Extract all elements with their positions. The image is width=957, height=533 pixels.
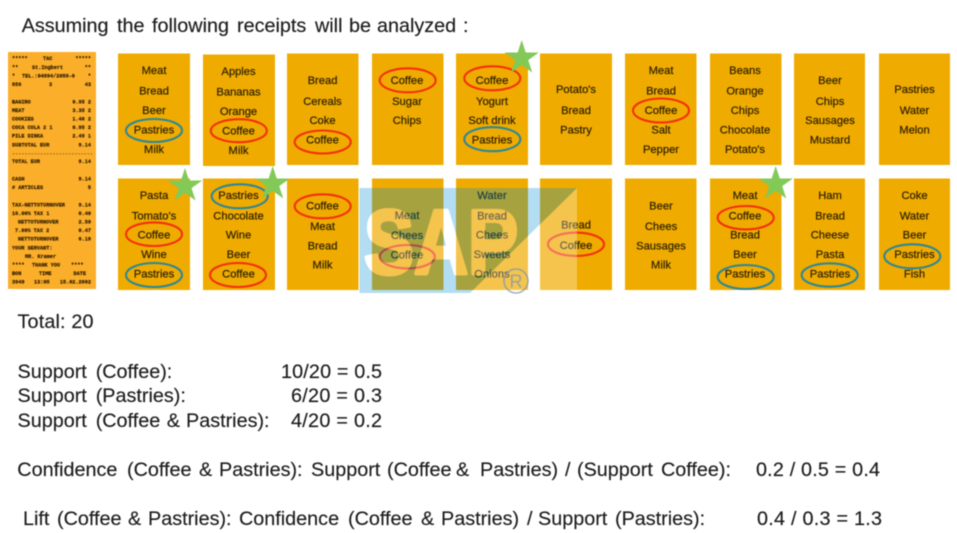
text: support coffee and pastries [18,410,382,432]
panel: basket 16: Coffee [560,240,592,252]
panel: basket 18: Bread [730,230,760,242]
panel: basket 20: Coke [901,190,928,202]
panel: basket 7: Pepper [643,144,679,156]
panel: sample receipt: BON [12,271,21,277]
panel: basket 16 [540,178,612,290]
panel: basket 4 [372,54,444,165]
panel: basket 18 [710,178,782,290]
panel: basket 10: Melon [899,124,930,136]
text: support coffee: (Coffee): [96,361,172,383]
panel: sample receipt: ** [12,65,18,71]
panel: sample receipt: ***** [12,56,28,62]
panel: sample receipt: CASH [12,176,24,182]
text: support coffee and pastries: Support [18,410,87,432]
panel: sample receipt: TIME [39,271,51,277]
panel: basket 5: Coffee [476,75,508,87]
panel: sample receipt: **** [12,262,24,268]
panel: basket 19: Pastries [810,269,851,281]
text: lift: & [421,508,434,530]
panel: sample receipt: * [88,74,91,80]
panel: basket 2 [203,54,275,166]
panel: basket 9 [794,54,865,165]
panel: basket 20: Fish [904,269,925,281]
text: confidence [17,459,880,481]
text: support coffee and pastries: Pastries): [186,410,270,432]
panel: sample receipt: THANK YOU [32,262,60,268]
panel: basket 16: Bread [561,219,591,231]
panel: basket 17: Beer [649,200,673,212]
panel: basket 5: Yogurt [476,96,509,108]
panel: basket 13 [287,178,358,290]
panel: basket 19: Ham [818,190,842,202]
panel: sample receipt: 43 [85,82,91,88]
panel: basket 8: Orange [726,86,764,98]
panel: basket 10: Pastries [894,84,935,96]
panel: basket 1: Beer [142,105,166,117]
panel: sample receipt: ** [85,65,91,71]
text: confidence: (Coffee [387,459,452,481]
panel: basket 9: Sausages [805,115,855,127]
panel: basket 19: Bread [815,210,845,222]
panel: basket 19: Cheese [811,230,849,242]
title: analyzed [377,15,456,37]
icon: star basket 11 [168,168,202,201]
panel: basket 11: Pastries [134,269,175,281]
panel: basket 4: Coffee [391,75,423,87]
panel: basket 6: Bread [561,105,591,117]
panel: sample receipt: # ARTICLES [12,185,43,191]
panel: sample receipt: 1.40 2 [72,116,91,122]
title: be [349,15,371,37]
panel: sample receipt: BAGIRO [12,100,31,106]
icon: star basket 5 [505,40,539,73]
panel: sample receipt: 0.95 2 [72,125,91,131]
panel: basket 14: Coffee [391,249,423,261]
panel: basket 1: Bread [139,86,169,98]
panel: sample receipt: NETTOTURNOVER [18,236,59,242]
panel: basket 19: Pasta [816,249,845,261]
text: lift: / [527,508,533,530]
panel: basket 20: Water [900,210,929,222]
panel: sample receipt: 3949 [12,280,24,286]
panel: basket 3 [287,54,358,165]
watermark: registered mark: R [510,272,522,292]
panel: basket 3: Cereals [303,96,342,108]
panel: sample receipt: 15.02.2002 [60,280,91,286]
panel: basket 19 [794,178,865,290]
panel: basket 11: Coffee [138,230,170,242]
panel: basket 8: Beans [729,65,761,77]
text: lift: Pastries) [441,508,519,530]
panel: basket 14: Meat [395,210,420,222]
panel: basket 2: Orange [220,106,257,118]
panel: basket 17: Milk [651,259,671,271]
panel: sample receipt: NETTOTURNOVER [18,220,59,226]
panel: sample receipt: 9.14 [79,142,91,148]
text: confidence: (Support [577,459,653,481]
panel: basket 1: Meat [142,65,167,77]
panel: sample receipt: 0.47 [79,228,91,234]
panel: basket 13: Coffee [306,200,339,212]
panel: basket 2: Bananas [216,86,261,98]
panel: basket 8 [710,54,782,165]
panel: basket 5: Soft drink [468,115,516,127]
panel: basket 9: Beer [818,75,842,87]
panel: basket 8: Chocolate [720,124,770,136]
panel: basket 6: Pastry [560,124,592,136]
panel: sample receipt: MEAT [12,108,24,114]
panel: basket 11 [118,178,190,290]
panel: basket 15: Chees [476,230,509,242]
panel: basket 6: Potato's [556,84,596,96]
title: will [314,15,342,37]
panel: basket 8: Potato's [725,144,765,156]
text: lift [23,508,882,530]
panel: basket 11: Wine [141,249,167,261]
text: support coffee and pastries: (Coffee [96,410,160,432]
panel: sample receipt: 16.00% TAX 1 [12,211,49,217]
text: confidence: & [199,459,212,481]
text: support pastries: Support [18,385,87,407]
text: confidence: Pastries): [219,459,303,481]
panel: sample receipt: 9.14 [79,176,91,182]
panel: basket 10 [879,54,950,165]
text: confidence: 0.2 / 0.5 = 0.4 [756,459,880,481]
panel: basket 20: Beer [903,230,927,242]
panel: sample receipt: 0.95 2 [72,100,91,106]
panel: basket 12: Chocolate [213,210,264,222]
panel: basket 12: Wine [226,230,251,242]
panel: basket 12 [203,178,275,290]
panel: basket 2: Milk [229,145,249,157]
title: Assuming [22,15,109,37]
panel: basket 9: Mustard [810,134,850,146]
title: following [152,15,229,37]
panel: basket 13: Meat [310,221,336,233]
text: confidence: Support [311,459,381,481]
panel: sample receipt: TAC [43,56,52,62]
panel: basket 17 [625,178,696,290]
panel: sample receipt: COOKIES [12,116,34,122]
panel: basket 14 [372,178,444,290]
panel: basket 10: Water [900,105,929,117]
panel: basket 2: Coffee [222,126,255,138]
panel: basket 18: Meat [733,190,758,202]
panel: basket 6 [540,54,612,165]
panel: basket 5 [456,54,528,165]
panel: sample receipt: * [12,74,15,80]
panel: basket 4: Chips [393,115,422,127]
text: lift: Confidence [239,508,339,530]
panel: sample receipt: **** [71,262,83,268]
panel: sample receipt: -------------------------- [12,151,93,157]
panel: sample receipt: 0.40 [79,211,91,217]
panel: basket 11: Pasta [140,190,169,202]
panel: sample receipt: 2.49 1 [72,134,91,140]
text: support coffee and pastries: 4/20 = 0.2 [291,410,382,432]
title: receipts [237,15,306,37]
panel: sample receipt: 2.59 [79,220,91,226]
text: support coffee and pastries: & [167,410,180,432]
text: confidence: Pastries) [480,459,558,481]
title: : [463,15,468,37]
panel: sample receipt: 856 [12,82,21,88]
panel: basket 15: Sweets [474,249,511,261]
panel: basket 20 [879,178,950,290]
panel: basket 11: Tomato's [132,210,177,222]
text: lift: (Pastries): [615,508,705,530]
text: confidence: Coffee): [661,459,731,481]
text: lift: 0.4 / 0.3 = 1.3 [757,508,882,530]
text: support coffee: Support [18,361,87,383]
panel: sample receipt: MR. Kramer [25,254,56,260]
text: lift: (Coffee [57,508,122,530]
text: support coffee: 10/20 = 0.5 [281,361,382,383]
panel: basket 20: Pastries [894,249,935,261]
panel: basket 3: Bread [308,75,337,87]
panel: basket 1: Pastries [134,124,175,136]
panel: basket 13: Bread [308,240,337,252]
text: support pastries [18,385,382,407]
panel: sample receipt: DATE [74,271,86,277]
panel: basket 7: Coffee [645,105,677,117]
text: lift: & [128,508,141,530]
panel: sample receipt: TAX-NETTOTURNOVER [12,202,66,208]
panel: basket 7: Bread [646,86,676,98]
title: the [117,15,144,37]
icon: star basket 12 [256,166,290,199]
watermark: SAP logo: SAP [364,192,518,294]
text: confidence: & [456,459,469,481]
panel: basket 18: Beer [733,249,757,261]
panel: sample receipt: TEL.:04894/2059-0 [22,74,75,80]
panel: sample receipt: 7.00% TAX 2 [15,228,49,234]
text: support pastries: 6/20 = 0.3 [291,385,382,407]
panel: sample receipt: YOUR SERVANT: [12,246,52,252]
panel: basket 12: Pastries [218,190,259,202]
text: total: Total: 20 [18,311,94,333]
panel: basket 9: Chips [816,96,845,108]
panel: sample receipt: 9.14 [79,202,91,208]
panel: sample receipt: TOTAL EUR [12,159,41,165]
panel: basket 7: Meat [649,65,674,77]
panel: sample receipt: ***** [75,56,91,62]
panel: sample receipt: COCA COLA 2 1 [12,125,52,131]
text: support pastries: (Pastries): [96,385,186,407]
panel: sample receipt: 3 [49,82,52,88]
panel: sample receipt: 5 [88,185,91,191]
text: lift: Lift [23,508,50,530]
panel: sample receipt: PILE DINKA [12,134,44,140]
panel: basket 7: Salt [651,124,672,136]
text: lift: Pastries): [148,508,232,530]
panel: sample receipt: SUBTOTAL EUR [12,142,50,148]
text: confidence: (Coffee [127,459,192,481]
panel: basket 2: Apples [221,66,256,78]
text: confidence: / [565,459,571,481]
panel: basket 8: Chips [731,105,760,117]
panel: basket 5: Pastries [472,134,513,146]
panel: basket 1: Milk [144,144,164,156]
panel: basket 13: Milk [313,259,333,271]
panel: basket 3: Coke [309,115,336,127]
icon: star basket 18 [759,166,793,199]
panel: basket 3: Coffee [306,134,339,146]
panel: sample receipt: 9.14 [79,159,91,165]
panel: basket 12: Beer [227,249,251,261]
panel: basket 18: Coffee [729,210,761,222]
panel: basket 15: Water [477,190,507,202]
text: lift: (Coffee [348,508,413,530]
panel: sample receipt: St.Ingbert [32,65,63,71]
panel: basket 15: Onions [474,269,510,281]
panel: basket 17: Chees [645,221,678,233]
panel: basket 15: Bread [477,210,507,222]
text: confidence: Confidence [17,459,117,481]
panel: basket 15 [456,178,528,290]
panel: basket 4: Sugar [392,96,422,108]
panel: basket 1 [118,54,190,165]
watermark: registered mark [504,269,528,293]
panel: basket 7 [625,54,696,165]
panel: basket 14: Chees [391,230,424,242]
panel: sample receipt: 13:05 [34,280,50,286]
panel: basket 17: Sausages [636,240,686,252]
panel: sample receipt: 3.35 2 [72,108,91,114]
text: support coffee [18,361,382,383]
panel: basket 12: Coffee [222,269,255,281]
panel: sample receipt: 6.18 [79,236,91,242]
panel: sample receipt [8,52,96,289]
text: lift: Support [538,508,608,530]
panel: basket 18: Pastries [725,269,766,281]
